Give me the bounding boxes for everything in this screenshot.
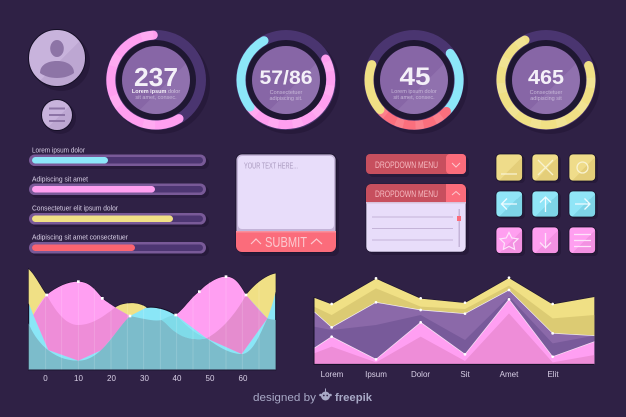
category labels: Amet (500, 370, 519, 379)
icon: close (532, 154, 561, 183)
ring gauge: 465: Consectetuer (530, 90, 563, 96)
category labels: Sit (460, 370, 470, 379)
icon: star (496, 227, 525, 256)
progress bar: Adipiscing sit amet (29, 176, 209, 198)
category labels: Ipsum (365, 370, 387, 379)
ring gauge: 237: sit amet, consec. (135, 95, 177, 101)
dropdown menu: closed (366, 154, 469, 177)
ring gauge: 465: 465 (528, 67, 564, 89)
x axis labels: 30 (140, 374, 149, 383)
icon: list lines (569, 227, 598, 256)
icon: arrow up (532, 191, 561, 219)
x axis labels: 40 (173, 374, 182, 383)
ring gauge: 45: sit amet, consec. (393, 95, 435, 101)
ring gauge: 465 (496, 30, 600, 134)
angular plot layers (314, 276, 594, 364)
ring gauge: 465: adipiscing sit (530, 96, 562, 102)
icon: menu button (42, 100, 76, 134)
progress bar: Lorem ipsum dolor: Lorem ipsum dolor (32, 148, 86, 154)
x axis labels: 20 (107, 374, 116, 383)
dropdown menu: closed: DROPDOWN MENU (375, 160, 438, 171)
icon: freepik mascot (319, 388, 332, 400)
dropdown menu: open: DROPDOWN MENU (375, 189, 438, 200)
ring gauge: 237 (106, 30, 210, 134)
icon: arrow right (569, 191, 598, 219)
category labels: Elit (547, 370, 559, 379)
icon: arrow left (496, 191, 525, 219)
ring gauge: 237: Lorem ipsum dolor (132, 89, 180, 95)
curved plot layers (29, 269, 276, 370)
icon button grid (496, 154, 598, 256)
area chart: curved waves (29, 269, 276, 383)
x axis labels: 60 (239, 374, 248, 383)
progress bar: Adipiscing sit amet: Adipiscing sit amet (32, 176, 88, 184)
category labels: Lorem (321, 370, 344, 379)
x axis labels: 50 (206, 374, 215, 383)
x axis labels (43, 374, 248, 383)
progress bar: Consectetuer elit ipsum dolor: Consectetuer elit ipsum dolor (32, 206, 119, 212)
footer attribution (253, 388, 373, 404)
icon: circle (569, 154, 598, 183)
ring gauge: 57/86 (236, 30, 340, 134)
x axis labels: 10 (74, 374, 83, 383)
ring gauge: 45: Lorem ipsum dolor (391, 89, 437, 95)
progress bar: Adipiscing sit amet consectetuer (29, 234, 209, 256)
ring gauge: 57/86: Consectetuer (270, 90, 303, 96)
x axis labels: 0 (43, 374, 48, 383)
icon: minimize (496, 154, 525, 183)
footer attribution: freepik (335, 392, 373, 404)
text input with submit button: SUBMIT (265, 234, 307, 251)
ring gauge: 45 (364, 30, 468, 134)
text input with submit button: YOUR TEXT HERE... (244, 162, 298, 170)
area chart: angular layers (314, 276, 594, 379)
dropdown menu: open (366, 184, 469, 255)
progress bar: Consectetuer elit ipsum dolor (29, 206, 209, 227)
ring gauge: 45: 45 (400, 63, 431, 91)
category labels (321, 370, 559, 379)
icon: user avatar (28, 30, 90, 91)
icon: arrow down (532, 227, 561, 256)
ring gauge: 57/86: 57/86 (260, 68, 312, 89)
ring gauge: 237: 237 (134, 62, 178, 92)
progress bars panel (29, 148, 209, 256)
footer attribution: designed by (253, 392, 317, 404)
text input with submit button (236, 154, 339, 256)
progress bar: Adipiscing sit amet consectetuer: Adipiscing sit amet consectetuer (32, 234, 129, 242)
ring gauge: 57/86: adipiscing sit. (269, 96, 303, 102)
progress bar: Lorem ipsum dolor (29, 148, 209, 169)
category labels: Dolor (411, 370, 430, 379)
